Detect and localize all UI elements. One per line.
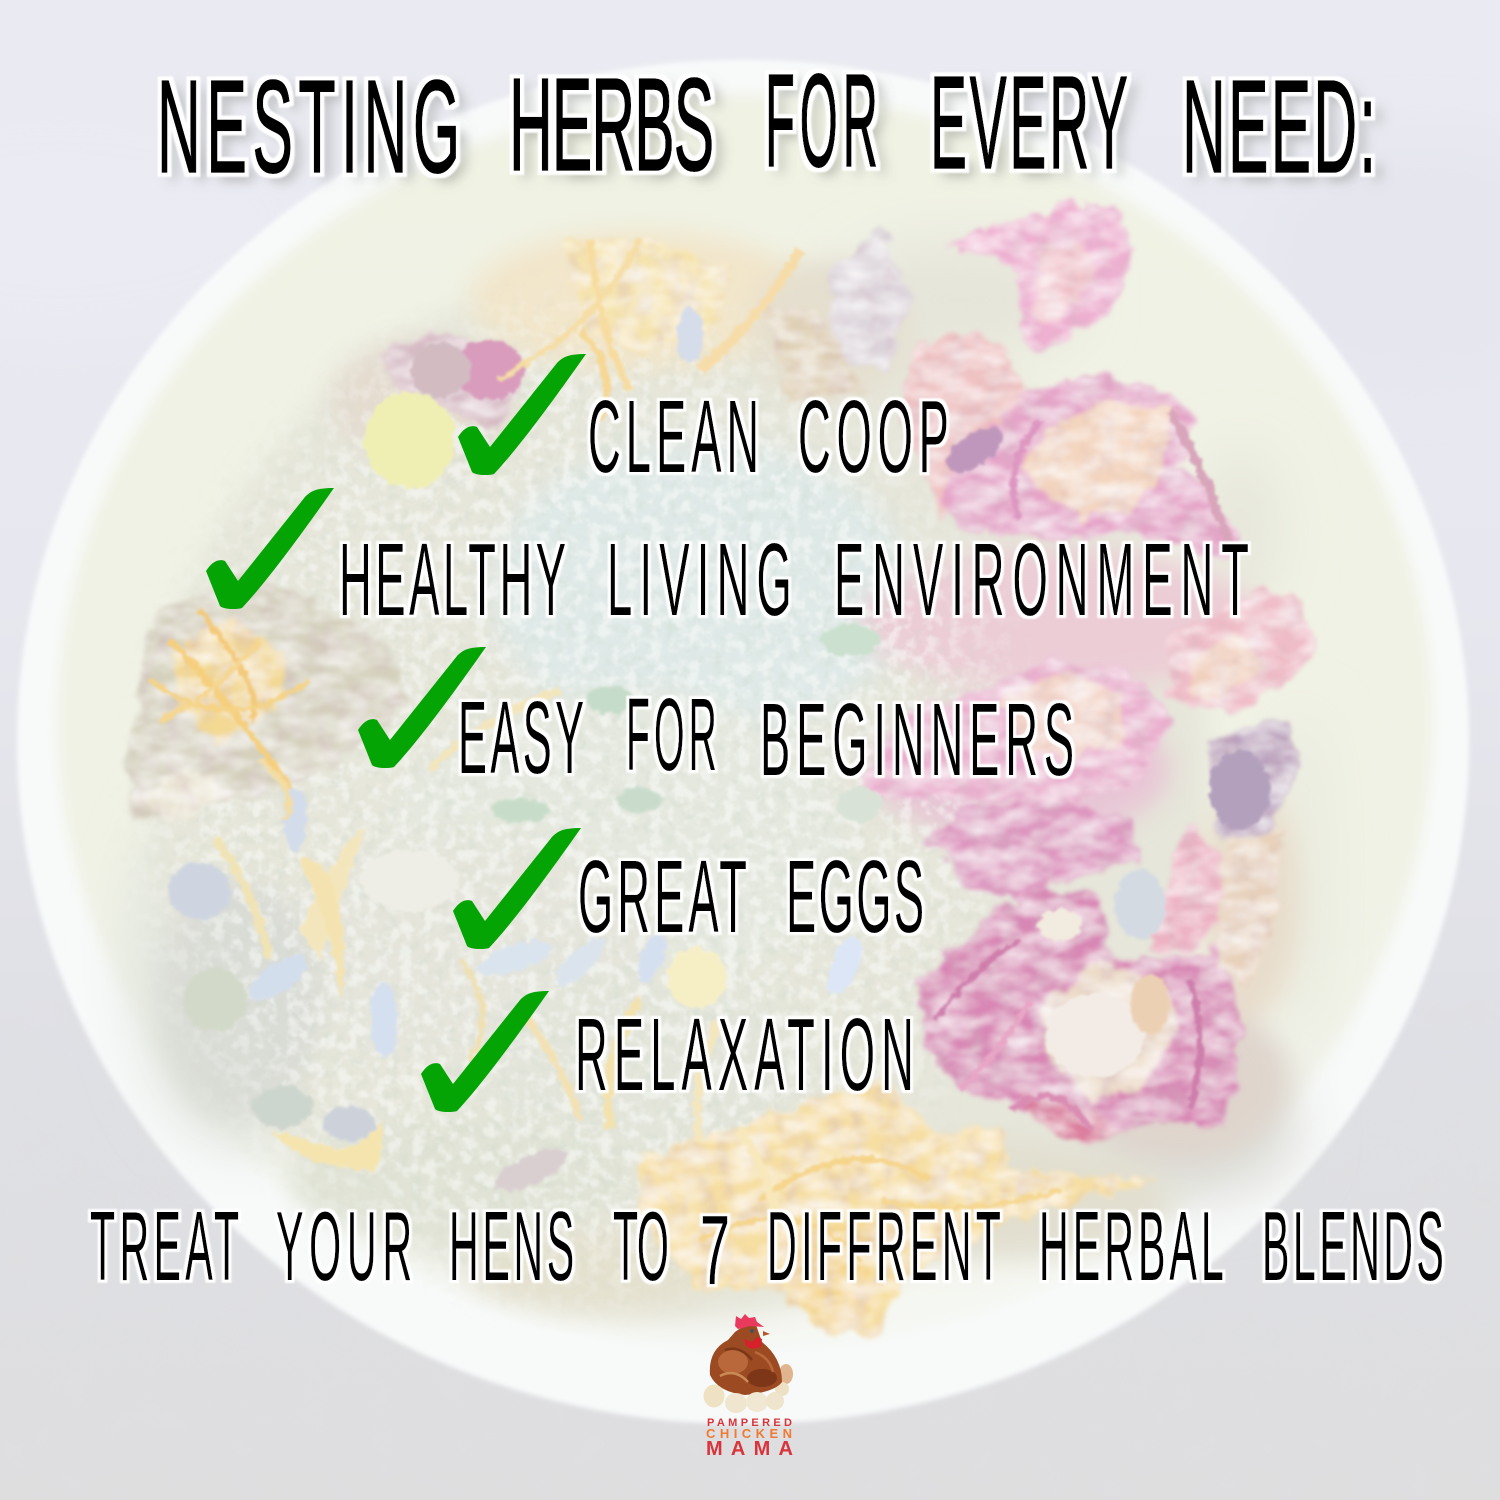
item: easy for beginners <box>358 647 1074 797</box>
logo text: MAMA <box>706 1438 793 1460</box>
icon: check mark <box>421 991 549 1112</box>
item: healthy living environment <box>206 488 1249 637</box>
icon: check mark <box>358 647 486 768</box>
item: relaxation: RELAXATION <box>575 997 914 1112</box>
tagline <box>90 1191 1444 1305</box>
item: easy for beginners: FOR <box>626 676 717 792</box>
tagline: BLENDS <box>1262 1191 1444 1301</box>
icon: check mark <box>206 488 334 609</box>
tagline: DIFFRENT <box>767 1191 1001 1301</box>
petals <box>125 201 1315 1335</box>
icon: check mark <box>458 354 586 475</box>
item: relaxation <box>421 991 914 1112</box>
item: clean coop: CLEAN <box>588 379 759 494</box>
logo text: CHICKEN <box>706 1426 792 1441</box>
icon: check mark <box>453 828 581 949</box>
logo: Pampered Chicken Mama <box>704 1314 793 1460</box>
checklist <box>206 354 1249 1112</box>
tagline: TO <box>613 1191 669 1301</box>
tagline: HERBAL <box>1039 1191 1224 1301</box>
title: HERBS <box>509 51 714 198</box>
herb speckle <box>166 305 993 1286</box>
item: healthy living environment: ENVIRONMENT <box>834 522 1249 637</box>
title: FOR <box>765 48 878 195</box>
item: easy for beginners: BEGINNERS <box>760 682 1074 797</box>
title <box>157 48 1376 200</box>
item: healthy living environment: LIVING <box>607 522 792 637</box>
logo text: PAMPERED <box>707 1417 792 1429</box>
logo text <box>706 1417 793 1460</box>
title: NESTING <box>157 53 460 200</box>
item: great eggs: EGGS <box>786 839 924 954</box>
item: easy for beginners: EASY <box>458 679 584 795</box>
item: healthy living environment: HEALTHY <box>339 522 566 637</box>
tagline: 7 <box>700 1195 730 1305</box>
tagline: TREAT <box>90 1191 239 1301</box>
tagline: YOUR <box>276 1191 412 1301</box>
title: EVERY <box>930 49 1128 197</box>
item: great eggs: GREAT <box>578 839 747 954</box>
item: clean coop <box>458 354 949 494</box>
tagline: HENS <box>449 1191 574 1301</box>
item: great eggs <box>453 828 924 954</box>
title: NEED: <box>1182 53 1376 200</box>
icon: hen on eggs <box>704 1314 793 1413</box>
item: clean coop: COOP <box>798 379 949 494</box>
